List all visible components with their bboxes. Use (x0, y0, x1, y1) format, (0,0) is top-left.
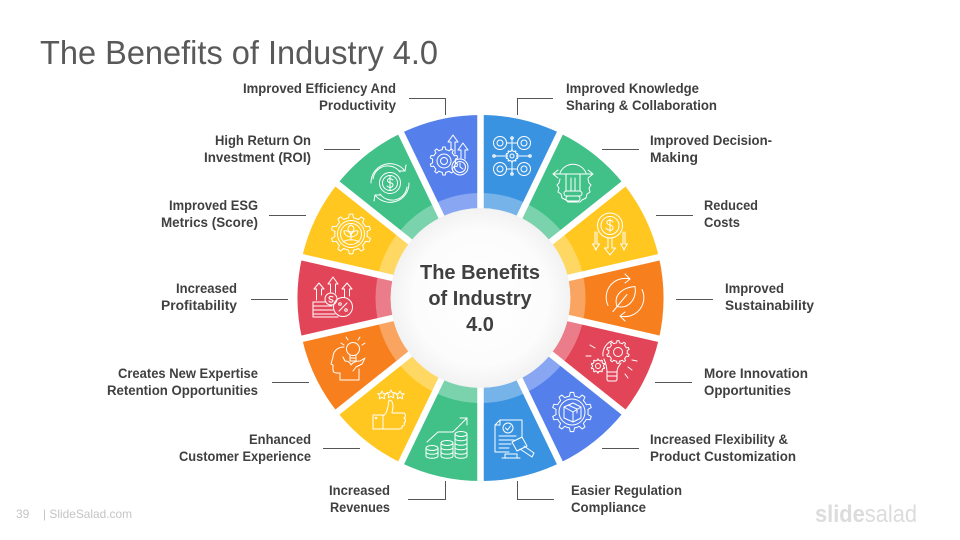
label: improved efficiency: Productivity (319, 98, 396, 113)
footer page number: 39 (16, 507, 30, 521)
icon: document with gavel (495, 420, 534, 458)
label: increased revenues: Increased (329, 483, 390, 498)
label: innovation opportunities: More Innovation (704, 366, 808, 381)
radial wheel chart (284, 99, 677, 497)
label: return on investment: Investment (ROI) (204, 150, 311, 165)
label: knowledge sharing: Sharing & Collaboration (566, 98, 717, 113)
center hub text: The Benefits (420, 262, 540, 284)
label: flexibility and customization (602, 432, 796, 464)
label: ESG metrics: Improved ESG (169, 198, 258, 213)
segment: customer experience (330, 264, 480, 463)
label: improved sustainability: Sustainability (725, 298, 814, 313)
label: knowledge sharing: Improved Knowledge (566, 81, 699, 96)
segment: flexibility (431, 298, 624, 474)
label: decision-making: Making (650, 150, 698, 165)
segment: regulation compliance (409, 298, 560, 497)
icon: coin with down arrows (592, 213, 628, 255)
label: expertise retention: Retention Opportunities (107, 383, 258, 398)
label: knowledge sharing (518, 81, 717, 115)
icon: money stack with percent (313, 277, 352, 317)
label: regulation compliance: Easier Regulation (571, 483, 682, 498)
label: flexibility and customization: Product Customization (650, 449, 796, 464)
label: customer experience (179, 432, 360, 464)
icon: network of gears (493, 136, 531, 176)
icon: gear with box (551, 392, 593, 432)
segment: reduced costs (480, 184, 673, 360)
label: ESG metrics: Metrics (Score) (161, 215, 258, 230)
label: return on investment: High Return On (215, 133, 311, 148)
icon: lightbulb with gears (586, 340, 637, 381)
label: decision-making: Improved Decision- (650, 133, 772, 148)
label: increased profitability (161, 281, 288, 313)
footer site name: | SlideSalad.com (43, 507, 132, 521)
label: decision-making (602, 133, 772, 165)
segment: revenues (401, 298, 480, 481)
label: reduced costs (656, 198, 758, 230)
icon: coins with growth arrow (426, 418, 467, 458)
label: flexibility and customization: Increased Flexibility & (650, 432, 788, 447)
segment: profitability (284, 221, 480, 339)
center hub text (420, 262, 540, 336)
icon: dollar with circular arrows (371, 164, 409, 202)
icon: head with lightbulb (331, 337, 365, 380)
icon: thumbs up with stars (373, 390, 406, 429)
segment: ESG metrics (302, 180, 498, 298)
footer logo wordmark: slidesalad (815, 501, 917, 528)
label: improved sustainability (676, 281, 814, 313)
title: The Benefits of Industry 4.0 (40, 34, 438, 71)
segment: innovation (463, 298, 659, 416)
label: increased revenues (329, 481, 446, 515)
icon: sustainability leaf with circular arrows (606, 274, 644, 321)
center hub text: 4.0 (466, 314, 494, 336)
label: reduced costs: Costs (704, 215, 740, 230)
label: increased profitability: Profitability (161, 298, 237, 313)
segment: improved knowledge (480, 115, 560, 298)
label: expertise retention (107, 366, 309, 398)
center hub text: of Industry (428, 288, 533, 310)
label: improved efficiency: Improved Efficiency And (243, 81, 396, 96)
label: customer experience: Customer Experience (179, 449, 311, 464)
label: reduced costs: Reduced (704, 198, 758, 213)
icon: gear with arrows and clock (429, 135, 468, 175)
icon: decision head with arrows (553, 164, 593, 202)
label: expertise retention: Creates New Expertise (118, 366, 258, 381)
label: innovation opportunities: Opportunities (704, 383, 791, 398)
label: improved sustainability: Improved (725, 281, 784, 296)
segment: decision-making (480, 133, 631, 332)
label: customer experience: Enhanced (249, 432, 311, 447)
label: improved efficiency (243, 81, 446, 115)
label: ESG metrics (161, 198, 306, 230)
segment: efficiency (401, 99, 552, 298)
label: return on investment (204, 133, 360, 165)
segment: sustainability (480, 257, 677, 375)
segment: return on investment (337, 122, 530, 298)
segment: expertise retention (288, 236, 480, 412)
label: regulation compliance (518, 481, 682, 515)
center hub circle (390, 208, 570, 388)
label: regulation compliance: Compliance (571, 500, 646, 515)
label: increased profitability: Increased (176, 281, 237, 296)
icon: gear with plant (330, 214, 372, 254)
label: innovation opportunities (655, 366, 808, 398)
label: increased revenues: Revenues (330, 500, 390, 515)
